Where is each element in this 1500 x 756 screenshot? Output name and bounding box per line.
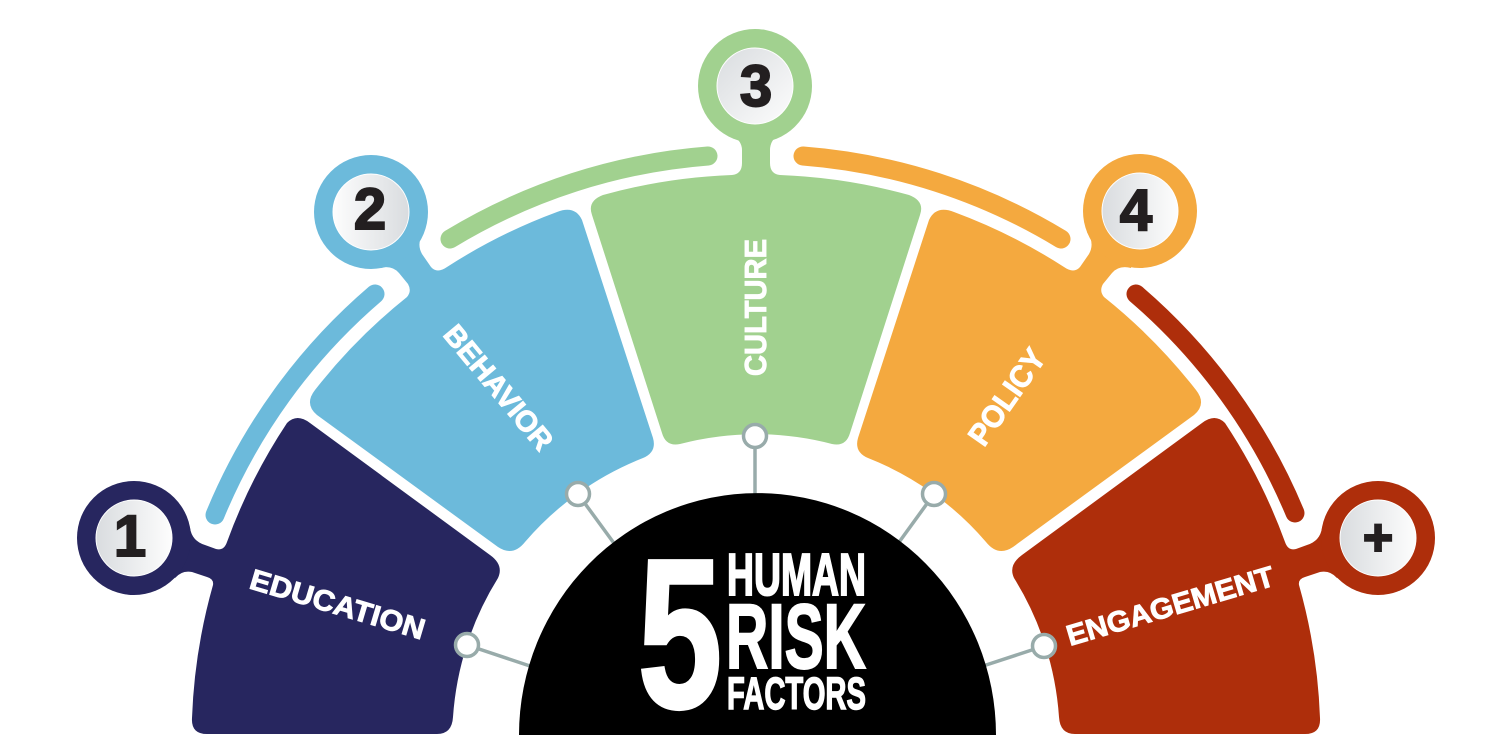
culture shape: [591, 135, 921, 445]
heading line: human: HUMAN: [727, 542, 866, 608]
panel: engagement segment: [1012, 294, 1435, 734]
education badge: 1: [114, 504, 146, 569]
panel: culture segment: [450, 29, 921, 445]
education badge: [77, 481, 191, 595]
heading line: risk: RISK: [726, 586, 866, 688]
title: 5 human risk factors: [638, 515, 866, 752]
behavior shape: [310, 210, 654, 551]
culture arc: [450, 156, 708, 239]
culture badge: 3: [740, 54, 772, 119]
behavior label: BEHAVIOR: [437, 319, 559, 457]
panel: behavior segment: [215, 155, 654, 551]
engagement badge: [1321, 481, 1435, 595]
culture badge: [698, 29, 812, 143]
policy badge: [1083, 154, 1197, 268]
engagement label: ENGAGEMENT: [1063, 561, 1278, 653]
panel: policy segment: [803, 154, 1201, 551]
behavior arc: [215, 294, 375, 515]
education label: EDUCATION: [246, 564, 429, 646]
engagement badge: +: [1363, 509, 1393, 567]
policy badge: 4: [1120, 178, 1152, 243]
engagement arc: [1136, 294, 1295, 513]
center black semicircle: [519, 493, 996, 735]
heading line: factors: FACTORS: [727, 668, 866, 719]
big numeral 5: 5: [638, 515, 722, 752]
education shape: [134, 418, 500, 734]
behavior badge: 2: [354, 177, 386, 242]
policy label: POLICY: [961, 342, 1053, 452]
policy arc: [803, 156, 1061, 239]
engagement shape: [1012, 418, 1378, 734]
connector lines and nodes: [456, 424, 1056, 667]
culture label: CULTURE: [738, 239, 773, 376]
panel: education segment: [77, 418, 500, 734]
behavior badge: [314, 155, 428, 269]
policy shape: [857, 210, 1201, 551]
